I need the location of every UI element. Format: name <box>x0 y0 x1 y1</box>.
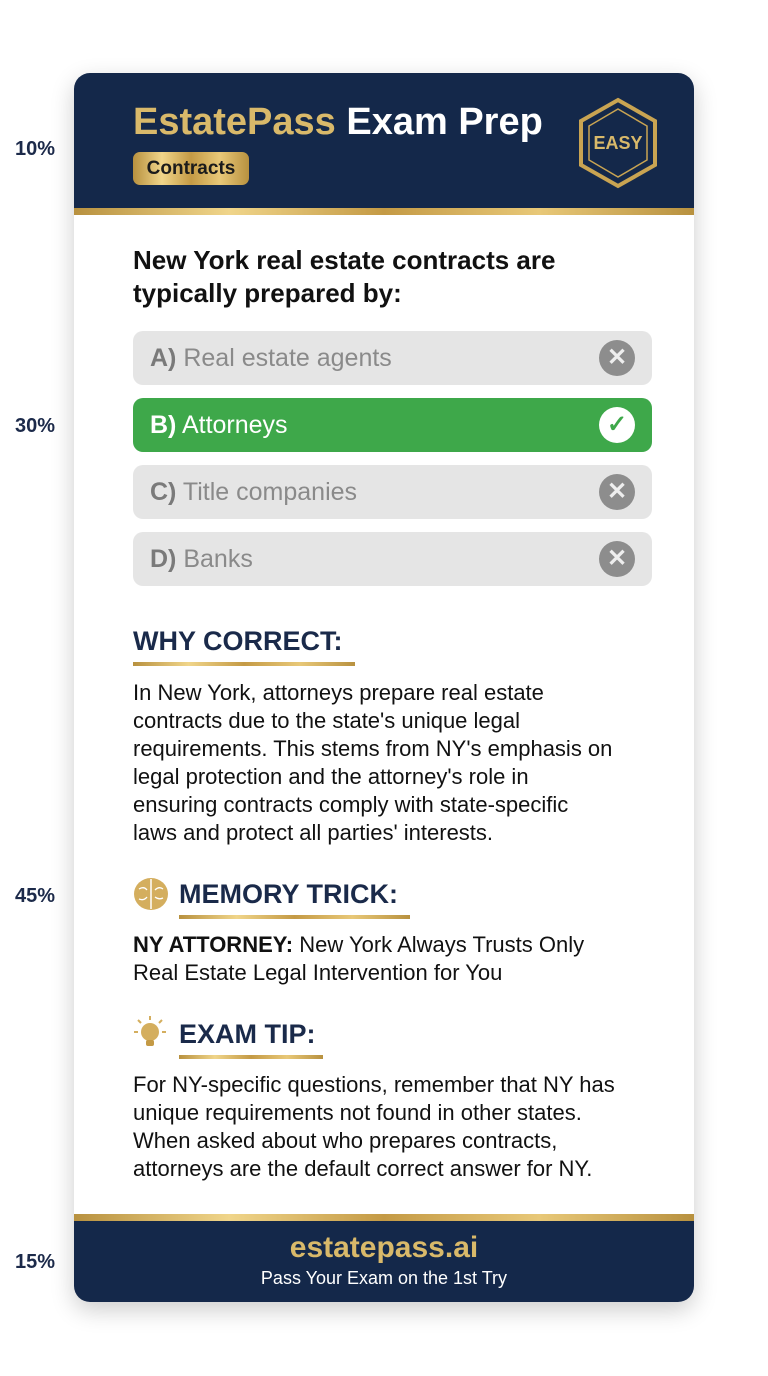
option C: ✕ <box>607 478 627 505</box>
text: memory trick <box>133 932 584 985</box>
label: 30%: 30% <box>15 415 55 437</box>
option B correct: ✓ <box>607 411 627 438</box>
text: exam tip: When asked about who prepares contracts, <box>133 1128 557 1153</box>
heading: exam tip: EXAM TIP: <box>179 1019 316 1049</box>
icon: brain <box>134 878 168 910</box>
question <box>133 245 555 308</box>
text: exam tip: attorneys are the default correct answer for NY. <box>133 1156 592 1181</box>
icon: lightbulb <box>134 1016 166 1046</box>
footer logo text: estatepass.ai <box>290 1231 478 1264</box>
icon: EASY hexagon <box>579 98 657 188</box>
text: exam tip: unique requirements not found in other states. <box>133 1100 582 1125</box>
option A: ✕ <box>607 344 627 371</box>
text: why correct: legal protection and the attorney's role in <box>133 764 529 789</box>
option C <box>133 465 652 519</box>
option A <box>133 331 652 385</box>
text: why correct: ensuring contracts comply with state-specific <box>133 792 568 817</box>
text: memory trick: NY ATTORNEY: New York Always Trusts Only <box>133 932 584 957</box>
question: typically prepared by: <box>133 278 402 308</box>
option D: D) Banks <box>150 545 253 573</box>
badge: Contracts <box>133 152 249 185</box>
option D: ✕ <box>607 545 627 572</box>
text: why correct: laws and protect all parties' interests. <box>133 820 493 845</box>
text: exam tip: For NY-specific questions, remember that NY has <box>133 1072 615 1097</box>
heading: why correct: WHY CORRECT: <box>133 626 343 656</box>
footer <box>74 1214 694 1302</box>
text: why correct: requirements. This stems from NY's emphasis on <box>133 736 612 761</box>
text: why correct: contracts due to the state's unique legal <box>133 708 520 733</box>
title: EstatePass Exam Prep <box>133 101 543 143</box>
text: why correct: In New York, attorneys prepare real estate <box>133 680 544 705</box>
label: 15%: 15% <box>15 1251 55 1273</box>
question: New York real estate contracts are <box>133 245 555 275</box>
text: why correct <box>133 680 612 845</box>
option A: A) Real estate agents <box>150 344 392 372</box>
option B correct <box>133 398 652 452</box>
option B correct: B) Attorneys <box>150 411 288 439</box>
footer tagline: Pass Your Exam on the 1st Try <box>261 1268 507 1288</box>
heading: memory trick: MEMORY TRICK: <box>179 879 398 909</box>
option D <box>133 532 652 586</box>
header <box>74 73 694 215</box>
label: 10%: 10% <box>15 138 55 160</box>
text: exam tip <box>133 1072 615 1181</box>
option C: C) Title companies <box>150 478 357 506</box>
text: memory trick: Real Estate Legal Intervention for You <box>133 960 502 985</box>
card <box>74 73 694 1302</box>
badge: Contracts: Contracts <box>147 158 235 179</box>
icon: EASY hexagon: EASY <box>593 133 643 153</box>
label: 45%: 45% <box>15 885 55 907</box>
